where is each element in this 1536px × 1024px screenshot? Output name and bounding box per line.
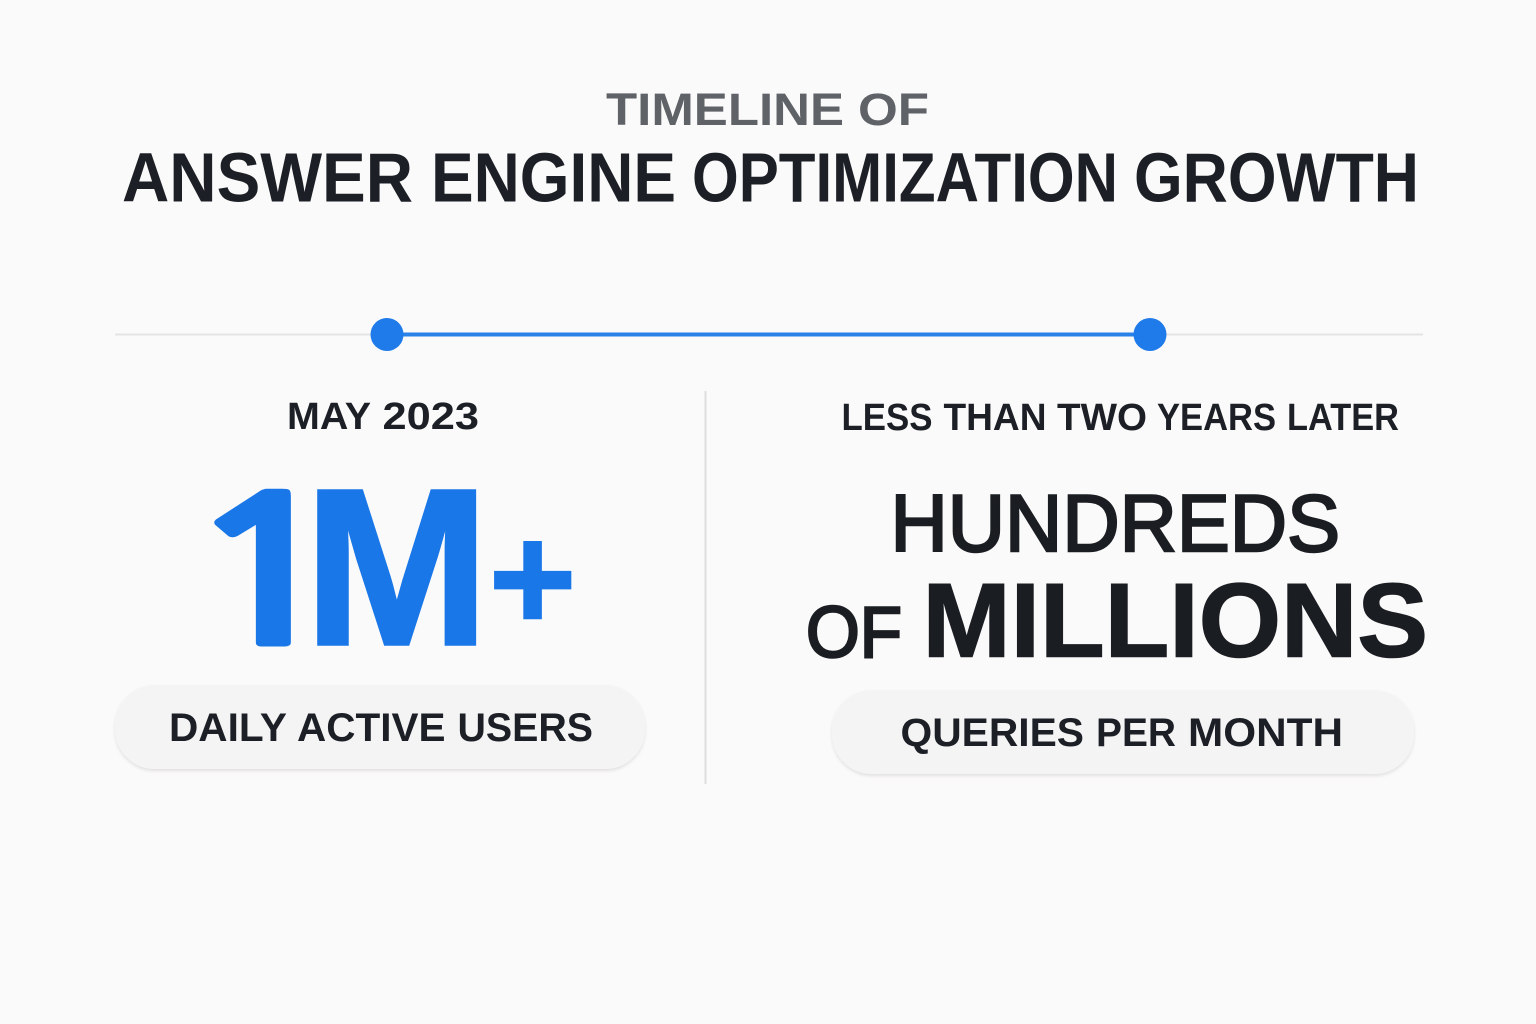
date label: LATER <box>1287 397 1399 439</box>
date label: YEARS <box>1157 397 1276 439</box>
date label: MAY <box>287 396 371 438</box>
date label: THAN <box>944 397 1046 439</box>
date label: TWO <box>1057 397 1147 439</box>
big value <box>806 479 1428 680</box>
title line 2: OPTIMIZATION <box>692 138 1118 216</box>
date label <box>287 396 479 438</box>
big value: MILLIONS <box>922 562 1428 680</box>
pill: daily active users: USERS <box>458 706 593 750</box>
title line 1 <box>606 84 929 135</box>
pill: daily active users <box>115 685 645 769</box>
date label <box>842 397 1399 439</box>
pill: queries per month <box>832 690 1414 774</box>
pill: daily active users: DAILY <box>169 706 287 750</box>
pill: daily active users: ACTIVE <box>297 706 446 750</box>
timeline <box>115 318 1423 351</box>
title line 2: ANSWER <box>122 138 413 216</box>
big number: 1 <box>179 474 355 675</box>
big number <box>179 443 576 692</box>
date label: LESS <box>842 397 932 439</box>
pill: queries per month: QUERIES <box>900 711 1084 755</box>
start marker <box>370 318 404 351</box>
title <box>122 84 1419 216</box>
big value: HUNDREDS <box>890 479 1340 569</box>
pill: queries per month: MONTH <box>1188 711 1343 755</box>
title line 1: TIMELINE <box>606 84 844 135</box>
title line 2 <box>122 138 1419 216</box>
pill: queries per month: PER <box>1096 711 1176 755</box>
title line 2: GROWTH <box>1134 138 1419 216</box>
end marker <box>1134 318 1166 351</box>
date label: 2023 <box>382 396 479 438</box>
title line 1: OF <box>858 84 929 135</box>
title line 2: ENGINE <box>431 138 676 216</box>
panel: May 2023 <box>115 396 645 769</box>
big number: M <box>304 443 490 692</box>
big value: OF <box>806 593 902 673</box>
big number: + <box>489 494 576 662</box>
panel: two years later <box>806 397 1428 774</box>
